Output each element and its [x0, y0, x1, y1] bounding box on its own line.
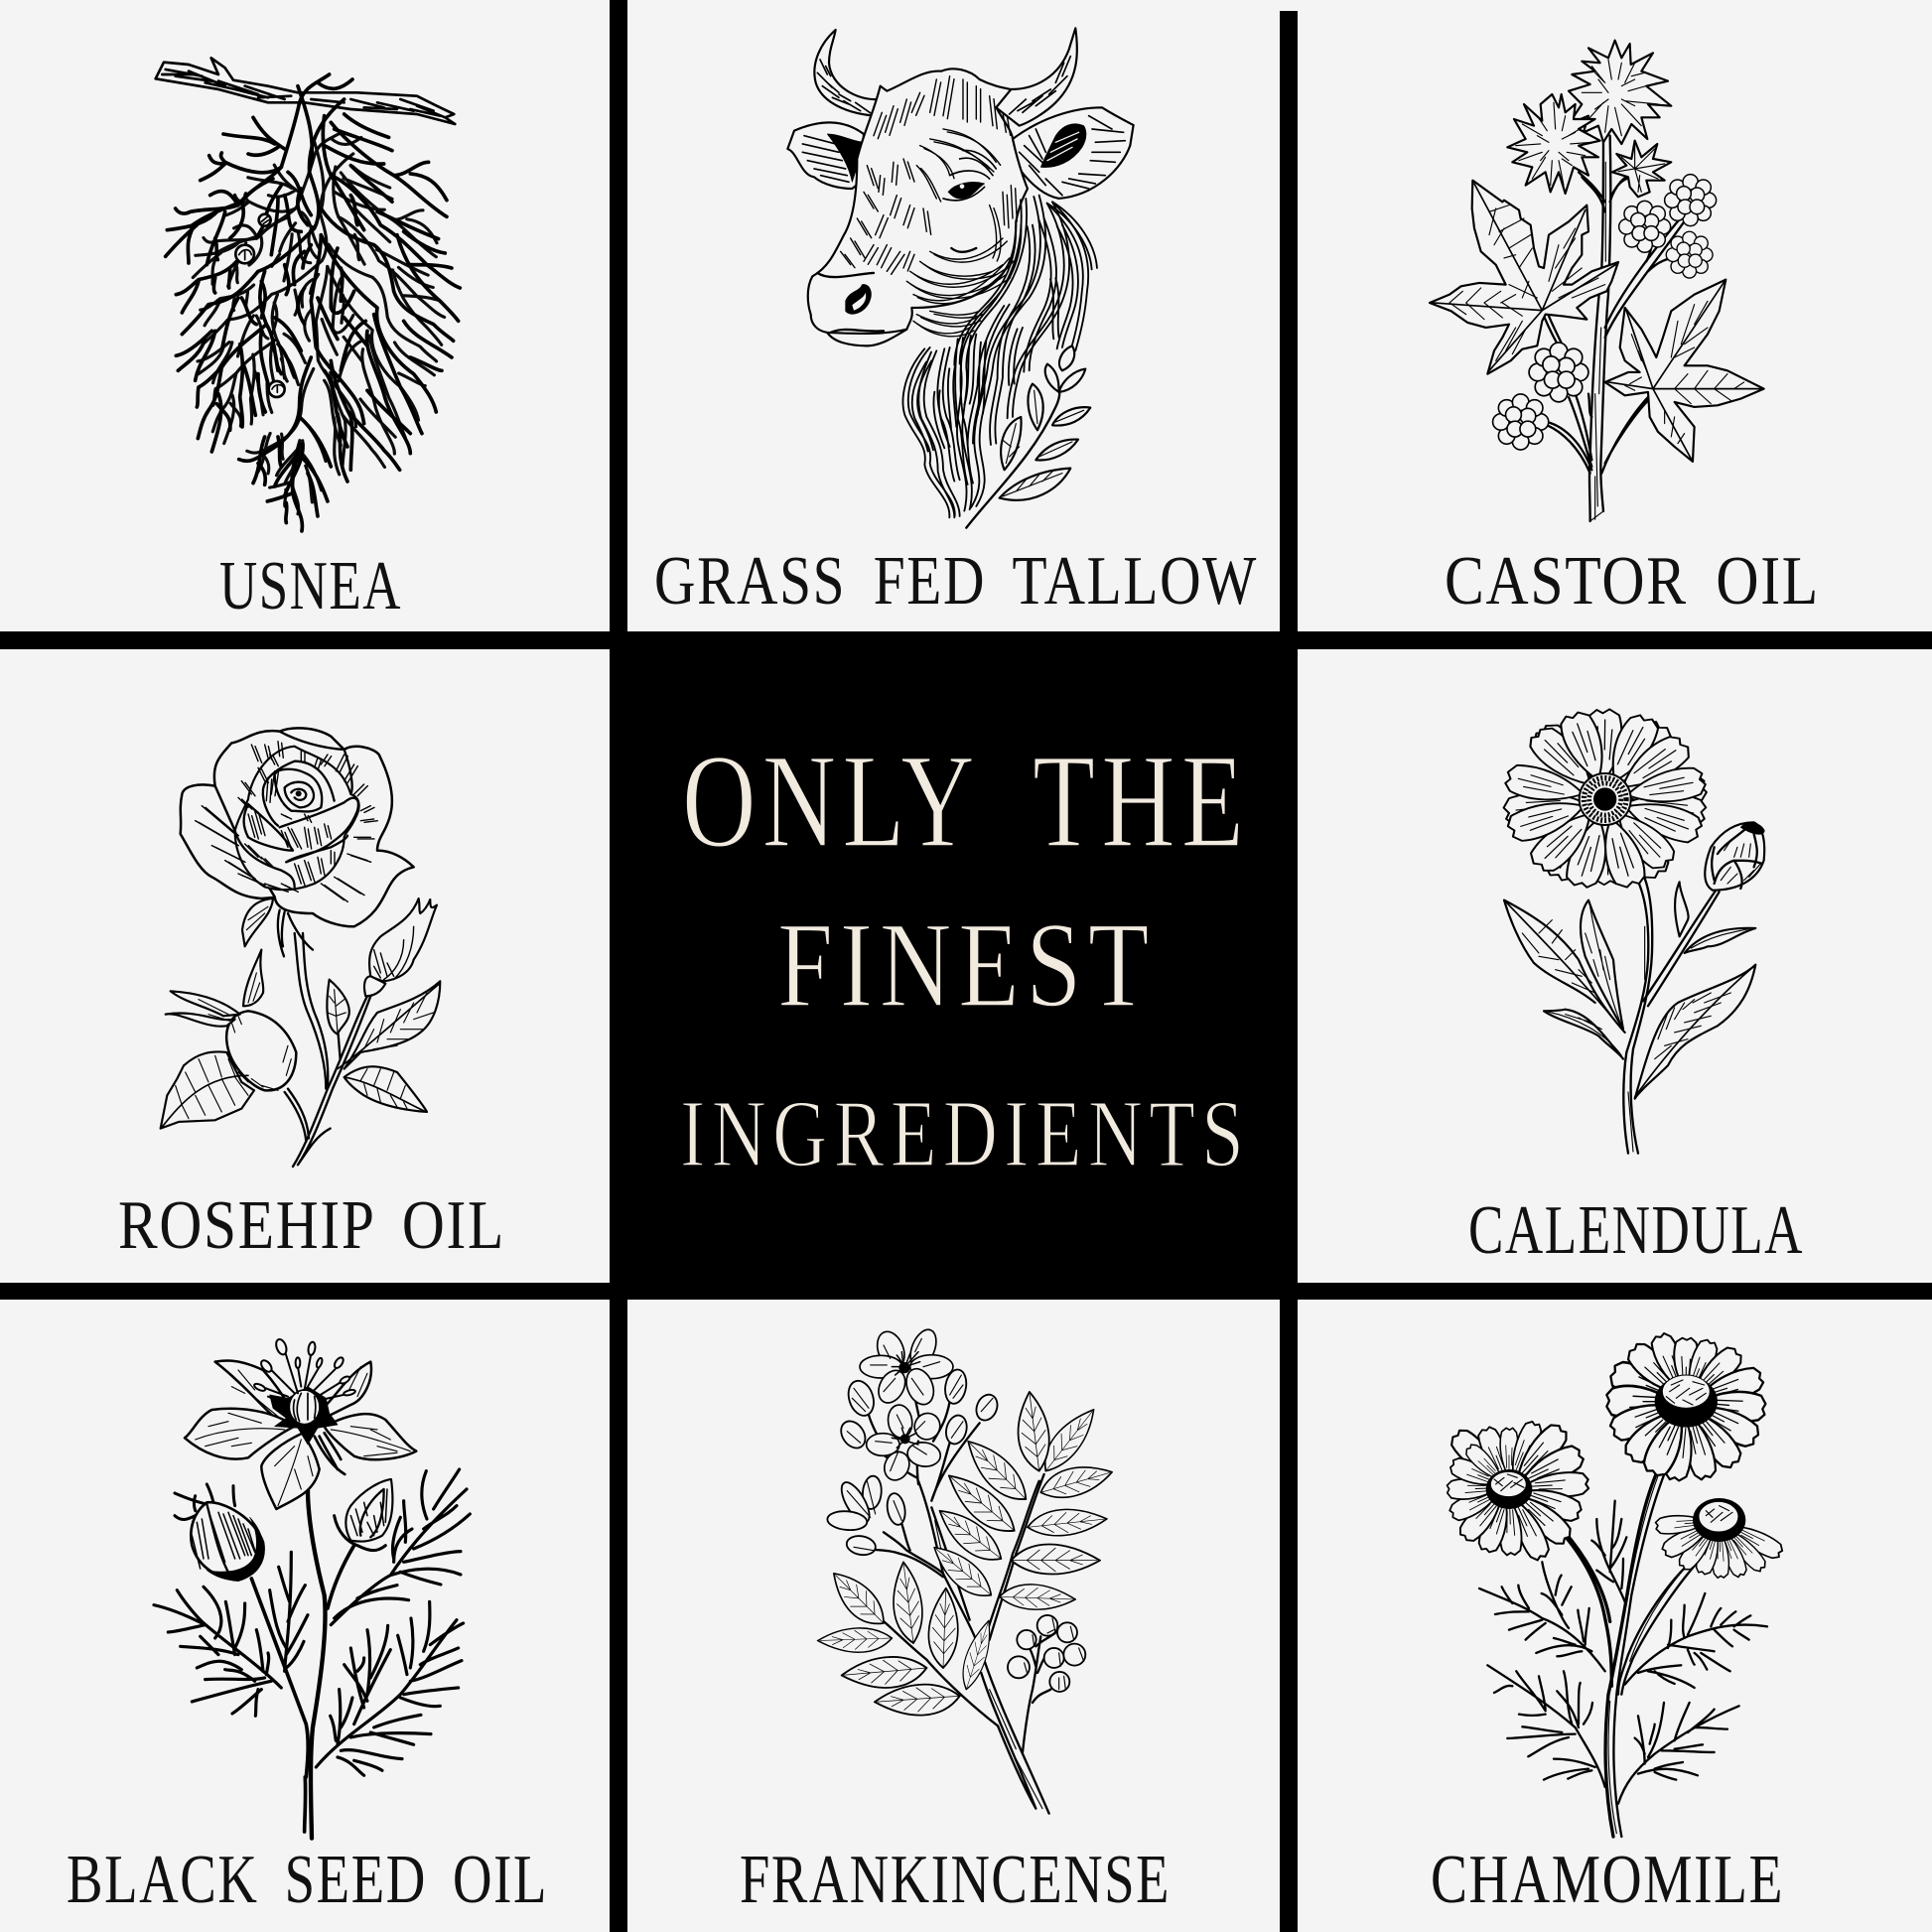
title line: finest: FINEST: [777, 897, 1156, 1033]
title line: only the: ONLY THE: [682, 728, 1250, 876]
panel: castor oil: [1298, 0, 1932, 631]
panel: rosehip oil: [0, 649, 610, 1283]
label: frankincense: FRANKINCENSE: [740, 1842, 1171, 1918]
label: black seed oil: BLACK SEED OIL: [67, 1842, 548, 1918]
panel: usnea: [0, 0, 610, 631]
icon: calendula flower: [1502, 709, 1764, 1154]
icon: frankincense branch: [817, 1326, 1116, 1814]
panel: frankincense: [627, 1300, 1280, 1932]
icon: rose with hip and bud: [161, 728, 440, 1167]
panel: grass fed tallow: [627, 0, 1298, 631]
icon: black seed plant: [154, 1338, 470, 1839]
label: chamomile: CHAMOMILE: [1431, 1842, 1784, 1918]
panel: title: [627, 649, 1280, 1300]
label: usnea: USNEA: [219, 548, 402, 624]
icon: cow head: [787, 28, 1134, 528]
label: rosehip oil: ROSEHIP OIL: [118, 1187, 505, 1264]
icon: chamomile plant: [1447, 1330, 1785, 1837]
label: calendula: CALENDULA: [1468, 1192, 1804, 1269]
icon: usnea lichen on branch: [156, 58, 460, 531]
title line: ingredients: INGREDIENTS: [680, 1080, 1250, 1186]
label: castor oil: CASTOR OIL: [1445, 543, 1820, 620]
panel: calendula: [1298, 649, 1932, 1283]
icon: castor plant: [1430, 41, 1764, 521]
panel: chamomile: [1298, 1300, 1932, 1932]
label: grass fed tallow: GRASS FED TALLOW: [654, 543, 1258, 620]
panel: black seed oil: [0, 1300, 610, 1932]
